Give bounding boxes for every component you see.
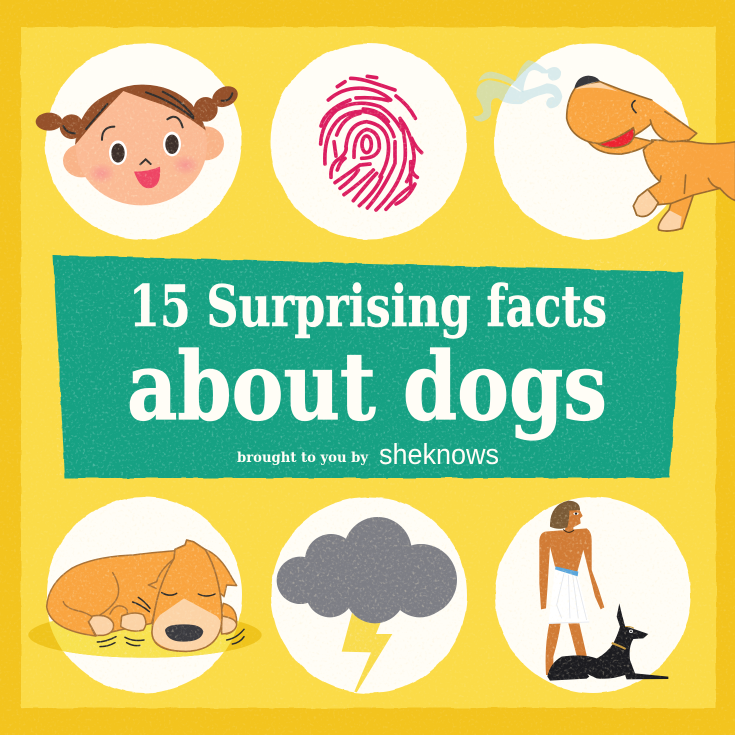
sheknows logo: sheknows	[379, 439, 499, 471]
icon: fingerprint	[321, 76, 422, 210]
title line 2: about dogs	[127, 332, 607, 442]
panel: circle fingerprint	[270, 44, 466, 240]
head	[588, 137, 653, 154]
title line 1: 15 Surprising facts	[129, 273, 607, 340]
icon: storm cloud with lightning	[277, 517, 457, 692]
banner texture	[56, 260, 666, 475]
icon: egyptian man	[539, 501, 668, 681]
panel: circle egyptian man and anubis dog	[495, 497, 691, 693]
panel: circle child face	[36, 44, 242, 240]
panel: circle panting dog	[473, 44, 735, 240]
lightning bolt	[342, 612, 392, 692]
sponsor line: brought to you by	[237, 450, 369, 466]
icon: anubis dog	[547, 603, 668, 681]
panel: circle storm cloud	[271, 497, 467, 693]
icon: dog with smell wisps	[473, 60, 735, 231]
panel: circle sleeping dog	[28, 497, 262, 693]
icon: sleeping dog on mat	[28, 540, 262, 658]
panel: green title banner	[53, 255, 683, 478]
hind leg	[658, 195, 693, 231]
icon: smiling girl with pigtails	[36, 82, 241, 205]
